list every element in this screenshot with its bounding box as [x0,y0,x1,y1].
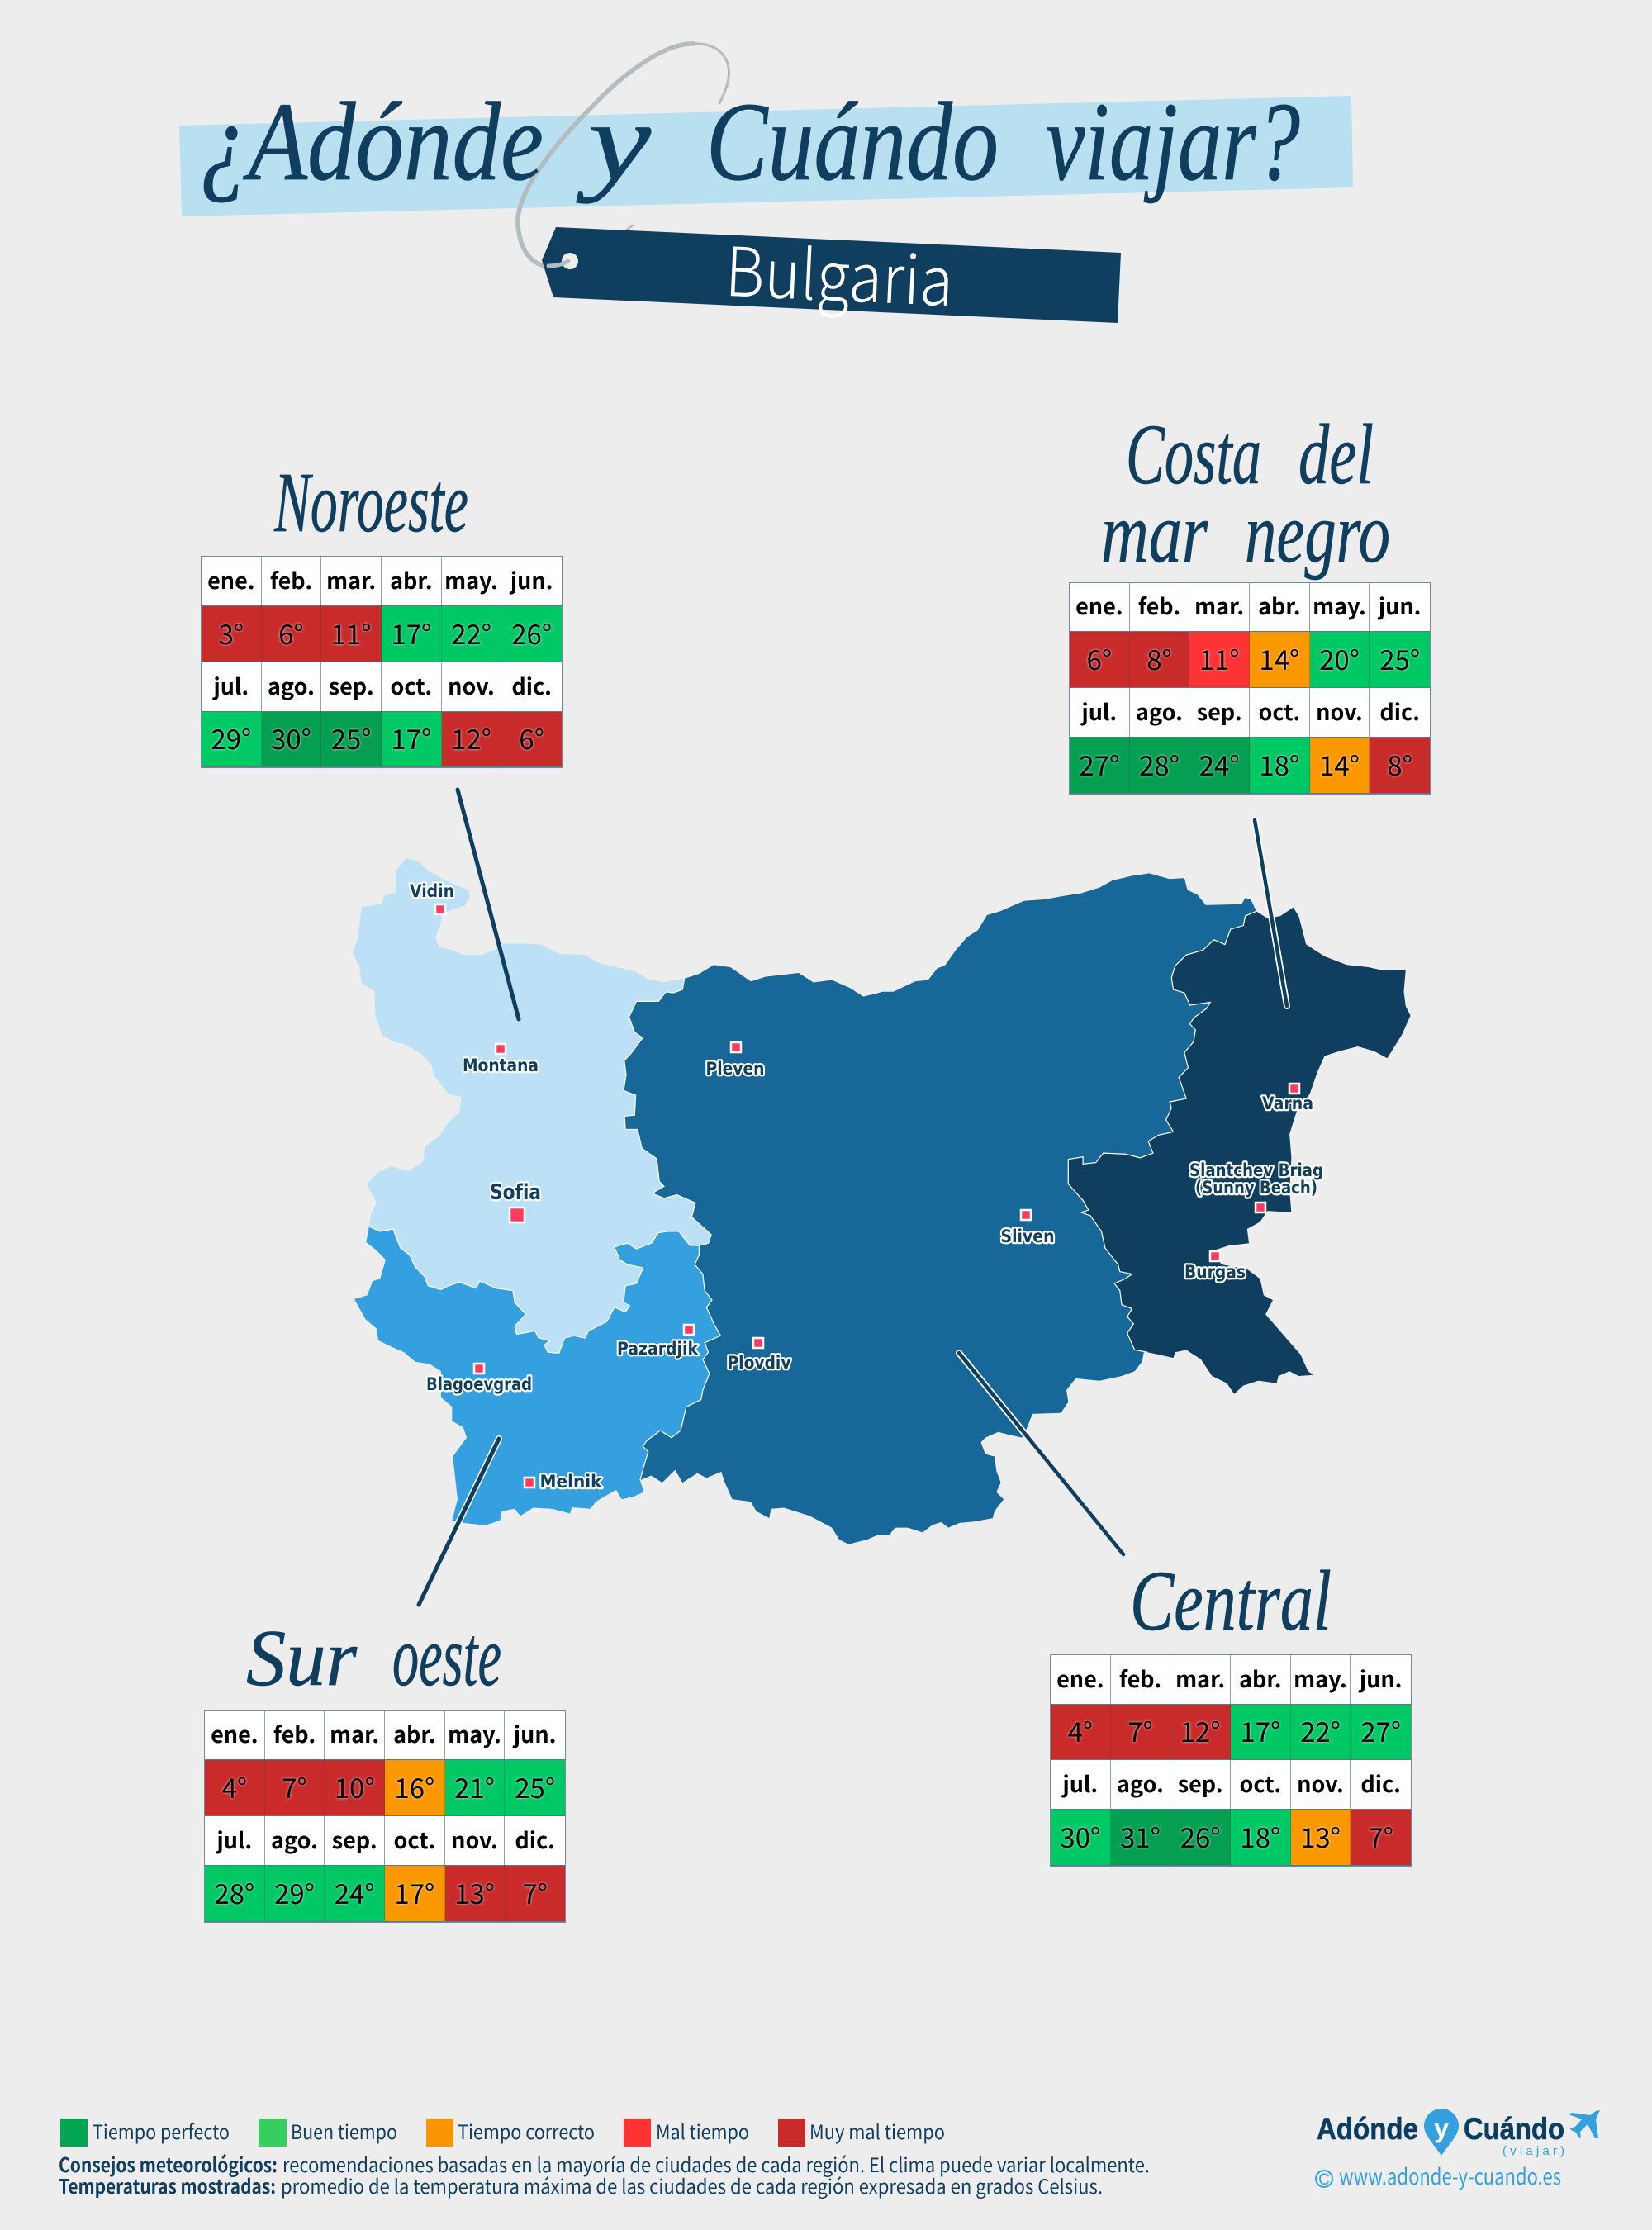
table: Noroeste: jun. [510,563,553,595]
table: Central: dic. [1360,1766,1401,1799]
table: Central: sep. [1178,1766,1223,1799]
table: Central: 7° [1127,1710,1153,1750]
temperature note: promedio de la temperatura máxima de las ciudades de cada región expresada en grados Celsius. [281,2171,1103,2199]
logo: Cuándo [1464,2112,1564,2146]
table: Noroeste [201,556,563,768]
city labels [410,881,1323,1492]
table: Noroeste: 30° [271,718,311,757]
heading: Sur oeste [246,1609,501,1704]
website credit: C [1318,2171,1330,2189]
heading: Costa del mar negro: negro [1245,486,1390,581]
table: Sur oeste: 10° [335,1766,375,1805]
main title: ¿Adónde [200,80,544,204]
table: Sur oeste: sep. [332,1822,377,1855]
heading: Sur oeste: oeste [392,1609,501,1704]
leader line: Sur oeste [419,1439,499,1605]
table: Central: mar. [1175,1662,1225,1693]
table: Central: 12° [1180,1710,1221,1750]
table: Noroeste: ago. [268,669,315,700]
city labels: Pleven [705,1059,765,1079]
table: Central: feb. [1119,1662,1161,1693]
city labels: Burgas [1184,1262,1246,1282]
table: Costa del mar negro: 20° [1319,638,1360,677]
table: Sur oeste: feb. [273,1717,316,1749]
legend: Mal tiempo [656,2116,749,2145]
logo: Adónde [1317,2112,1418,2146]
table: Sur oeste: 7° [522,1872,548,1911]
table: Costa del mar negro: ago. [1136,694,1183,727]
city labels: Vidin [410,881,454,901]
table: Sur oeste [204,1710,566,1923]
table: Noroeste: 6° [519,718,544,757]
legend: Buen tiempo [291,2116,397,2145]
city labels: Plovdiv [727,1353,791,1373]
table: Costa del mar negro: 8° [1387,743,1412,783]
table: Sur oeste: may. [448,1717,501,1749]
table: Noroeste: nov. [448,669,495,700]
legend [60,2116,945,2147]
icon: map pin [1424,2109,1459,2156]
table: Sur oeste: 24° [335,1872,375,1911]
table: Sur oeste: 17° [394,1872,434,1911]
table: Sur oeste: 7° [282,1766,307,1805]
table: Sur oeste: dic. [515,1822,555,1855]
table: Central: 17° [1240,1710,1280,1750]
table: Noroeste: sep. [329,669,374,700]
table: Noroeste: 26° [511,613,552,652]
table: Sur oeste: ago. [271,1822,318,1855]
table: Costa del mar negro: 11° [1199,638,1240,677]
table: Costa del mar negro: 8° [1146,638,1172,677]
heading: Costa del mar negro: Costa [1126,407,1261,502]
table: Central [1050,1654,1412,1867]
table: Sur oeste: 16° [394,1766,434,1805]
city labels: Blagoevgrad [426,1374,532,1394]
main title: viajar? [1046,80,1300,204]
table: Central: oct. [1239,1766,1281,1799]
table: Sur oeste: jun. [514,1717,556,1749]
heading: Central: Central [1130,1554,1332,1649]
table: Costa del mar negro [1069,582,1431,795]
city labels: Slantchev Briag [1189,1160,1323,1180]
table: Noroeste: ene. [207,563,255,595]
table: Costa del mar negro: 14° [1319,743,1360,783]
table: Noroeste: may. [444,563,498,595]
table: Sur oeste: mar. [330,1717,379,1749]
logo: (viajar) [1502,2144,1564,2158]
region: Central [624,873,1256,1544]
heading: Noroeste: Noroeste [273,455,468,550]
website credit: www.adonde-y-cuando.es [1339,2159,1561,2191]
leader line: Noroeste [458,790,519,1019]
region: Costa del mar negro [1068,908,1411,1394]
map of Bulgaria [353,858,1411,1544]
leader line: Costa [1255,820,1287,1006]
table: Sur oeste: jul. [216,1822,252,1855]
table: Costa del mar negro: jul. [1081,694,1117,727]
temperature note: Temperaturas mostradas: [59,2171,276,2199]
table: Sur oeste: 28° [214,1872,254,1911]
table: Sur oeste: 13° [454,1872,495,1911]
table: Noroeste: 29° [211,718,251,757]
table: Sur oeste: abr. [393,1717,436,1749]
table: Noroeste: oct. [390,669,432,700]
table: Costa del mar negro: 14° [1259,638,1299,677]
country tag [542,217,1121,325]
region borders [369,911,1256,1480]
table: Noroeste: mar. [326,563,376,595]
table: Central: ago. [1117,1766,1164,1799]
table: Costa del mar negro: 27° [1079,743,1119,783]
table: Noroeste: 3° [219,613,244,652]
legend: Muy mal tiempo [809,2116,945,2145]
table: Costa del mar negro: jun. [1379,589,1421,621]
table: Noroeste: 6° [278,613,304,652]
table: Costa del mar negro: sep. [1197,694,1242,727]
icon: plane [1569,2110,1600,2138]
region: Sur oeste [354,1226,720,1525]
legend: Tiempo correcto [458,2116,595,2145]
title band [179,96,1353,216]
heading: Costa del mar negro [1101,407,1390,581]
table: Central: may. [1294,1662,1347,1693]
table: Costa del mar negro: dic. [1379,694,1420,727]
heading: Costa del mar negro: del [1298,407,1374,502]
table: Central: 22° [1300,1710,1341,1750]
table: Central: 18° [1240,1815,1280,1855]
logo: y [1434,2114,1449,2143]
table: Costa del mar negro: 28° [1139,743,1180,783]
table: Costa del mar negro: 6° [1087,638,1112,677]
table: Central: jun. [1360,1662,1402,1693]
table: Costa del mar negro: feb. [1138,589,1180,621]
table: Noroeste: abr. [390,563,433,595]
city labels: Pazardjik [617,1339,699,1359]
city markers [435,904,1299,1487]
city labels: Sofia [490,1180,541,1205]
table: Central: 27° [1360,1710,1401,1750]
table: Central: 31° [1120,1815,1161,1855]
table: Noroeste: feb. [270,563,312,595]
city labels: Sliven [1001,1226,1054,1246]
table: Central: 26° [1180,1815,1221,1855]
tag string [518,44,729,266]
leader line: Central [959,1353,1123,1554]
city labels: Melnik [540,1472,602,1492]
table: Noroeste: 12° [451,718,491,757]
heading: Costa del mar negro: mar [1101,486,1208,581]
table: Noroeste: 22° [451,613,491,652]
table: Central: 13° [1300,1815,1341,1855]
table: Costa del mar negro: mar. [1194,589,1244,621]
table: Costa del mar negro: 25° [1379,638,1420,677]
weather note: recomendaciones basadas en la mayoría de ciudades de cada región. El clima puede variar localmente. [282,2149,1150,2178]
table: Central: jul. [1062,1766,1098,1799]
main title: y [576,80,652,204]
table: Central: 30° [1060,1815,1100,1855]
table: Central: 7° [1368,1815,1393,1855]
table: Central: ene. [1056,1662,1104,1693]
table: Noroeste: 25° [331,718,372,757]
country tag: Bulgaria [724,217,956,325]
table: Costa del mar negro: ene. [1075,589,1123,621]
table: Costa del mar negro: abr. [1258,589,1301,621]
table: Central: nov. [1297,1766,1344,1799]
table: Sur oeste: nov. [451,1822,498,1855]
table: Sur oeste: 4° [222,1766,247,1805]
table: Sur oeste: 21° [454,1766,495,1805]
table: Costa del mar negro: 18° [1259,743,1299,783]
weather note: Consejos meteorológicos: [59,2149,278,2178]
legend: Tiempo perfecto [93,2116,230,2145]
table: Sur oeste: ene. [211,1717,259,1749]
table: Sur oeste: oct. [393,1822,435,1855]
region: Noroeste [353,858,711,1353]
city labels: Montana [463,1056,539,1075]
table: Noroeste: 17° [391,613,431,652]
main title [200,80,1300,204]
table: Costa del mar negro: may. [1313,589,1366,621]
table: Costa del mar negro: nov. [1316,694,1363,727]
main title: Cuándo [706,80,999,204]
table: Costa del mar negro: 24° [1199,743,1240,783]
logo [1317,2109,1600,2158]
table: Sur oeste: 25° [515,1766,555,1805]
table: Sur oeste: 29° [274,1872,315,1911]
table: Central: 4° [1068,1710,1093,1750]
city labels: (Sunny Beach) [1195,1178,1317,1198]
city labels: Varna [1262,1094,1313,1113]
table: Noroeste: 11° [331,613,372,652]
table: Noroeste: 17° [391,718,431,757]
table: Noroeste: dic. [511,669,552,700]
table: Costa del mar negro: oct. [1258,694,1300,727]
table: Central: abr. [1239,1662,1282,1693]
table: Noroeste: jul. [213,669,249,700]
heading: Sur oeste: Sur [246,1614,358,1703]
